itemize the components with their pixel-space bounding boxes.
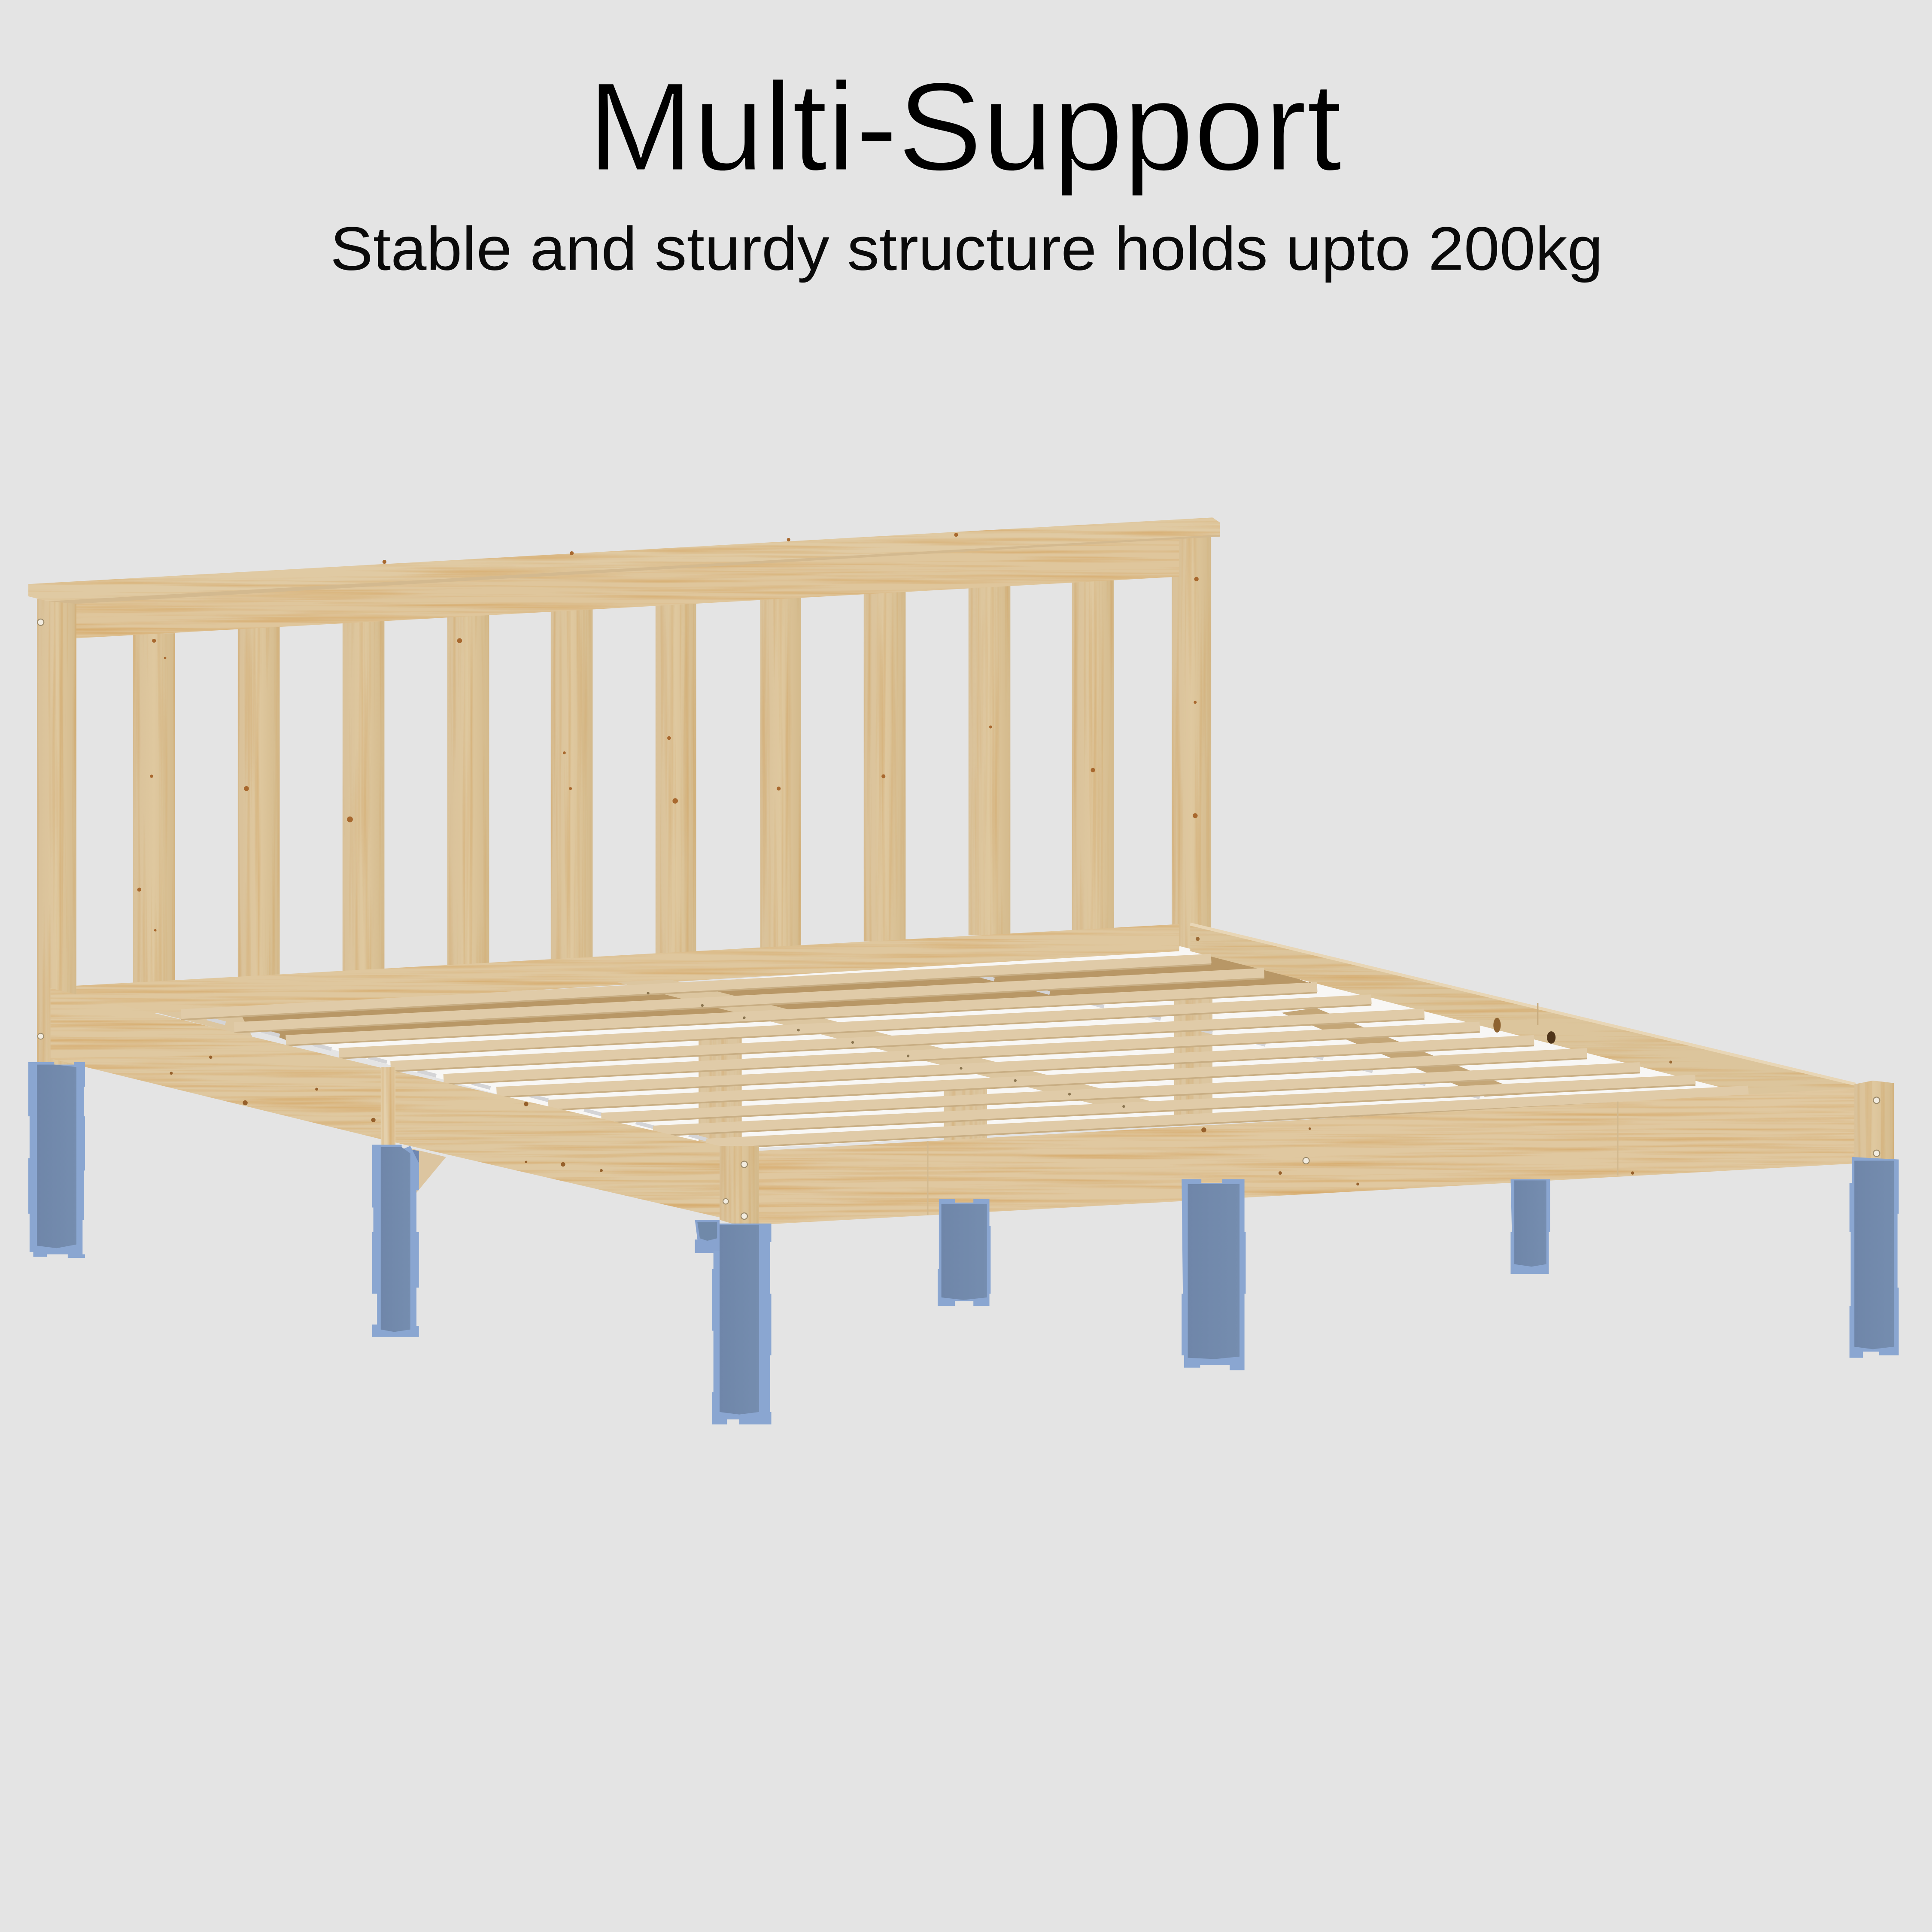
subtitle: Stable and sturdy structure holds upto 200kg (330, 215, 1603, 283)
highlighted legs (28, 1062, 1899, 1425)
rail screws (647, 992, 1125, 1108)
leg: front centre (1182, 1179, 1245, 1370)
leg: rear left (28, 1062, 85, 1258)
headboard (28, 517, 1220, 1065)
right support rail and brace (1282, 1008, 1528, 1097)
brace highlight (410, 1150, 419, 1198)
leg: left middle (372, 1145, 419, 1337)
leg: front middle left (938, 1199, 990, 1306)
headboard vertical slats (133, 580, 1114, 984)
leg: front right corner (1850, 1157, 1899, 1358)
wooden legs seen through slats (699, 993, 1212, 1143)
bed frame (28, 517, 1894, 1227)
front corner post (720, 1146, 759, 1227)
upper headboard rail (76, 534, 1179, 638)
leg: front right inner (1510, 1179, 1550, 1274)
corner brace (410, 1148, 446, 1193)
right headboard post (1172, 534, 1211, 959)
right inner side rail (1190, 924, 1856, 1095)
front rail (759, 1088, 1862, 1225)
platform interior (76, 924, 1856, 1151)
rear platform rail (76, 924, 1179, 1018)
left headboard post (37, 599, 76, 1065)
metal slat strips (207, 975, 1480, 1140)
headboard top cap (28, 517, 1220, 604)
title: Multi-Support (588, 57, 1342, 197)
tan rear gap behind slats (216, 955, 1317, 1040)
headboard screw (37, 619, 44, 626)
knots on headboard (137, 533, 1199, 932)
centre support rail (616, 980, 1177, 1112)
eleven bed slats (181, 959, 1748, 1143)
white floor between slats (216, 946, 1756, 1151)
leg: front corner (712, 1224, 772, 1425)
left rear corner fill (123, 1000, 252, 1037)
left side rail (51, 988, 720, 1217)
left rail screw (38, 1033, 44, 1039)
leg: centre rear hidden (695, 1220, 720, 1253)
slat undersides (181, 964, 1748, 1149)
right end post (1854, 1081, 1894, 1160)
